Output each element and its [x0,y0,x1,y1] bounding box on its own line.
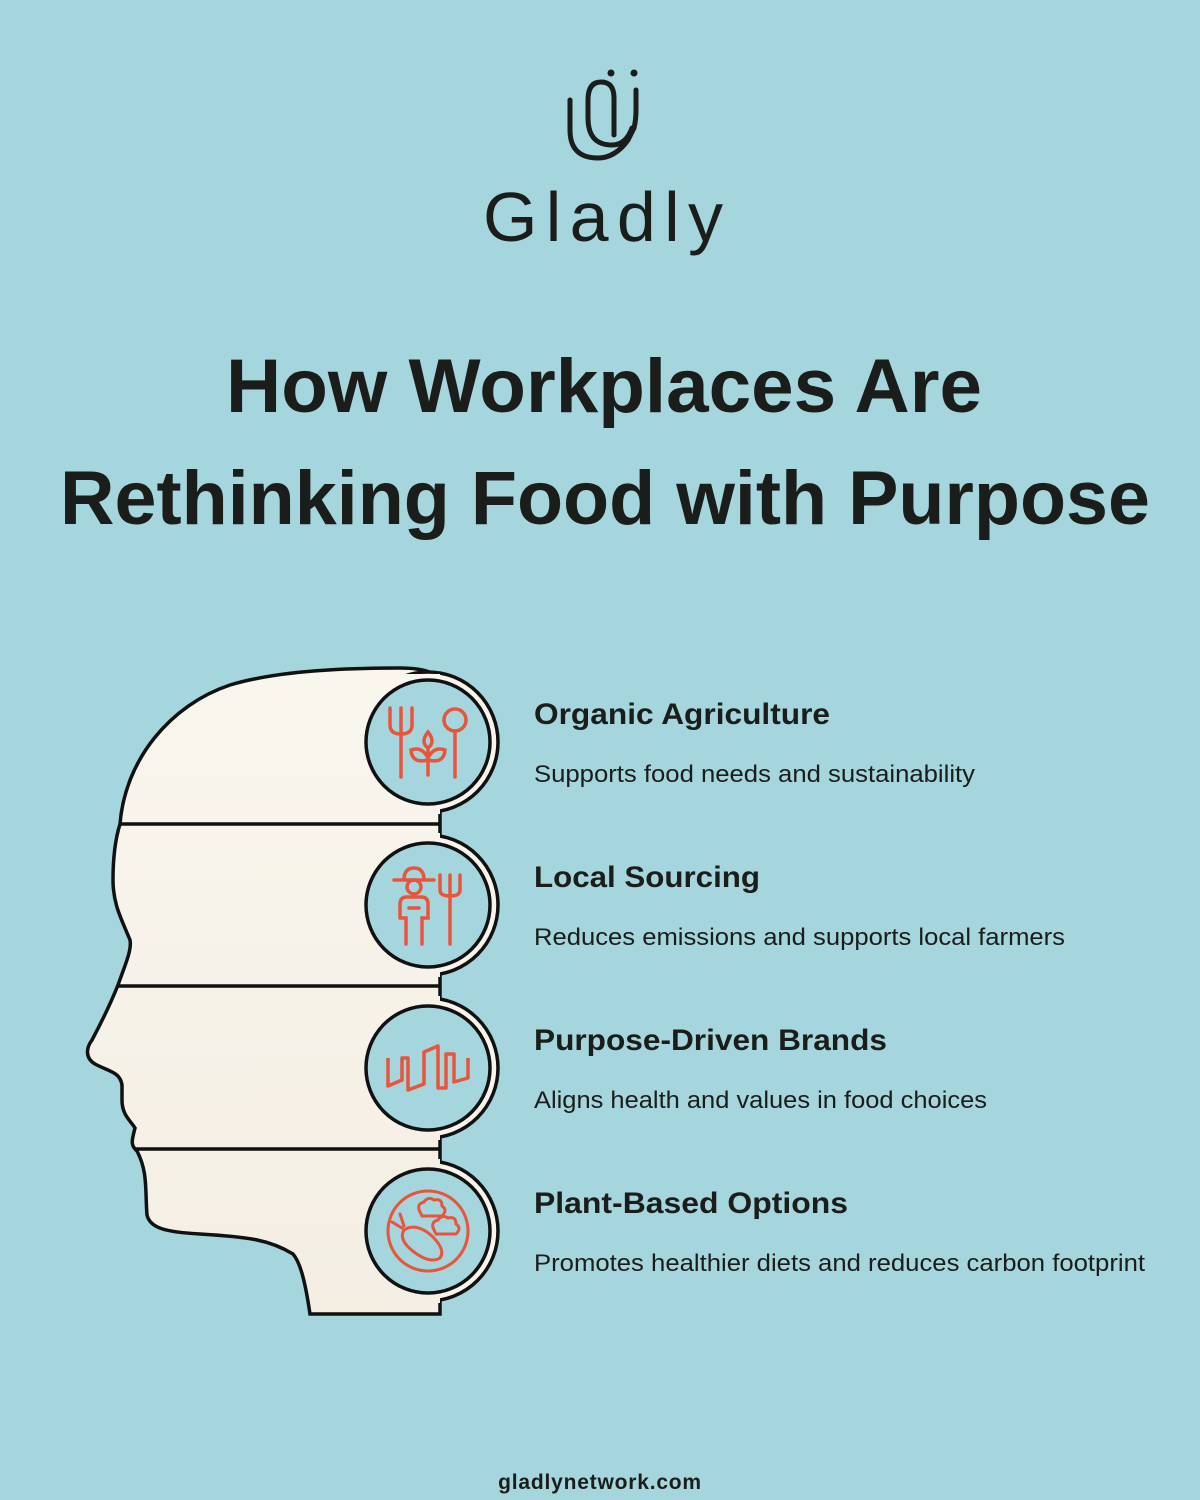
item: plant-based options: Plant-Based Options [534,1187,848,1220]
logo wordmark: Gladly [483,178,723,256]
icon: farmer with pitchfork [394,868,460,944]
icon: wave pattern [388,1046,468,1090]
icon: carrot and broccoli plate [388,1191,468,1271]
item texts [534,698,1145,1277]
item: organic agriculture: Supports food needs and sustainability [534,761,975,788]
item: local sourcing [534,861,1065,951]
head diagram [80,668,498,1314]
item: purpose-driven brands [534,1024,987,1114]
footer url: gladlynetwork.com [498,1471,702,1494]
item: organic agriculture [534,698,975,788]
item: organic agriculture: Organic Agriculture [534,698,830,731]
item: plant-based options [534,1187,1145,1277]
item: purpose-driven brands: Aligns health and values in food choices [534,1087,987,1114]
title: How Workplaces Are [226,344,982,429]
title: Rethinking Food with Purpose [60,456,1150,541]
item: local sourcing: Reduces emissions and supports local farmers [534,924,1065,951]
icon: fork plant spoon [390,708,466,777]
logo icon [570,70,638,158]
item: plant-based options: Promotes healthier diets and reduces carbon footprint [534,1250,1145,1277]
item: local sourcing: Local Sourcing [534,861,760,894]
item: purpose-driven brands: Purpose-Driven Brands [534,1024,887,1057]
title [60,344,1150,541]
